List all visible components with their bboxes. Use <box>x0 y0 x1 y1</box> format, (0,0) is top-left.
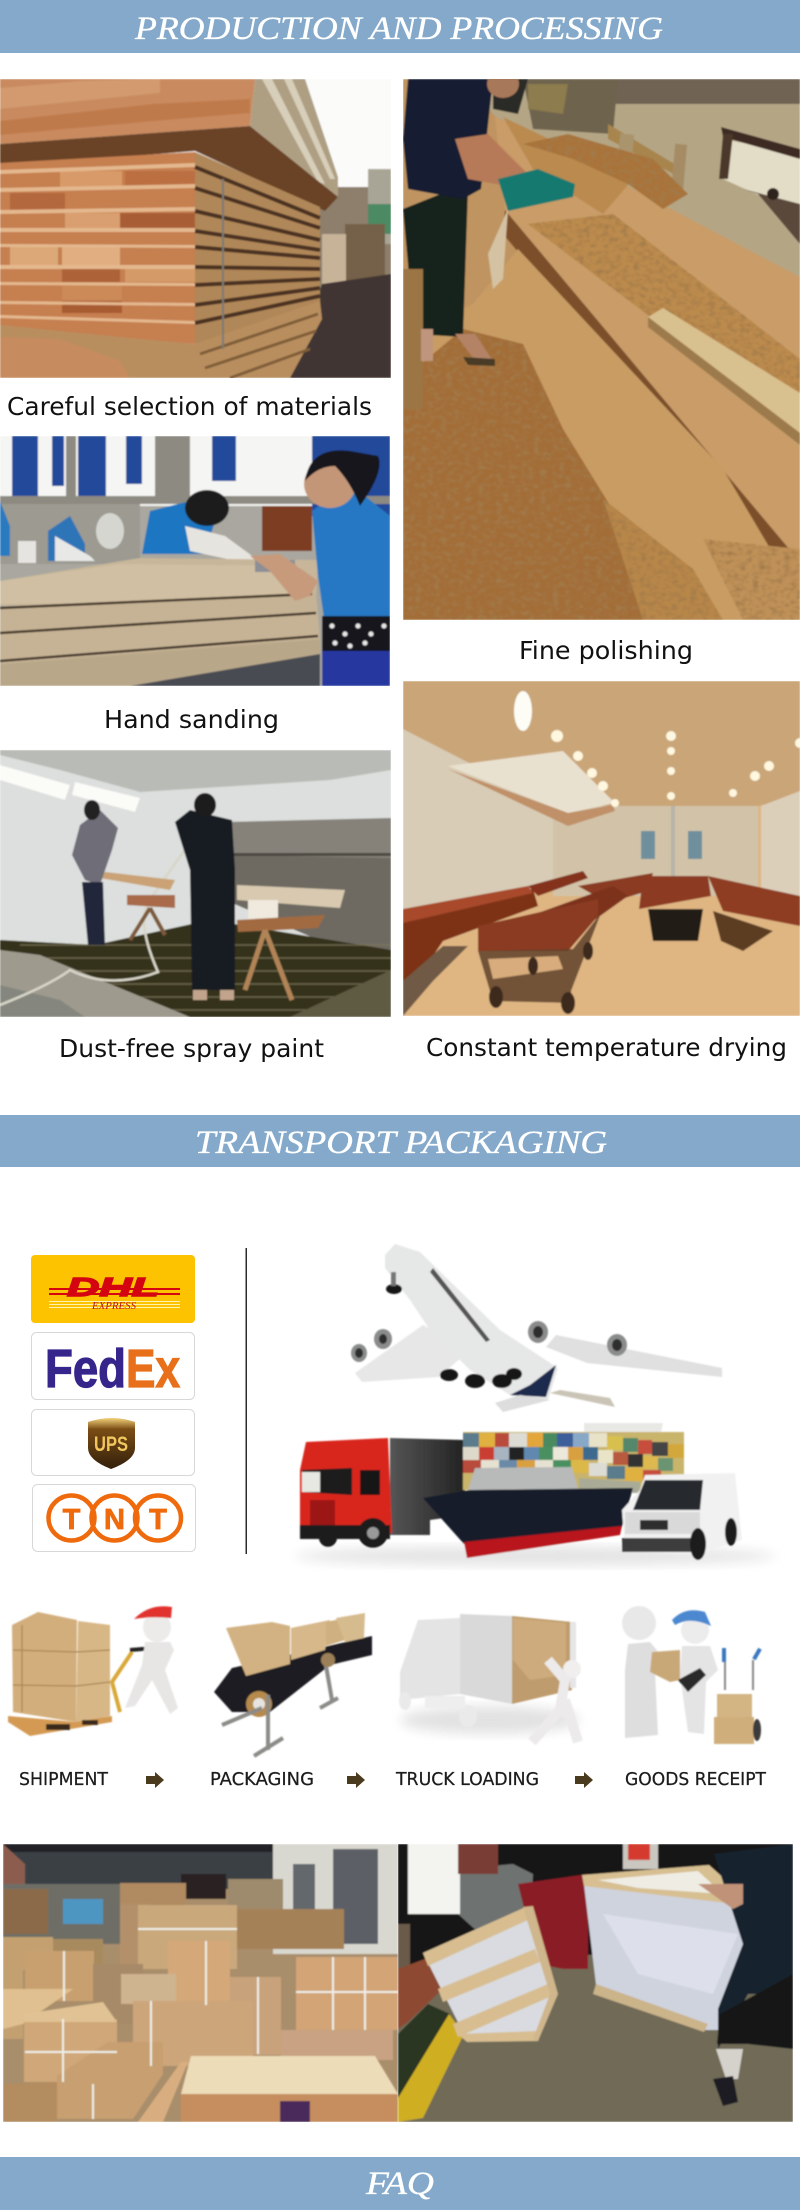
logo: UPS: UPS <box>94 1433 128 1456</box>
arrow: shipment to packaging <box>146 1772 164 1788</box>
caption: fine polishing: Fine polishing <box>519 636 693 665</box>
photo: stacked lumber <box>0 79 391 378</box>
illustration: airplane <box>351 1244 722 1412</box>
photo: wooden crates and wrapped goods <box>398 1844 793 2122</box>
logo: DHL Express <box>31 1255 195 1323</box>
photo: fine polishing workshop <box>403 79 800 620</box>
logo: TNT: N <box>104 1504 125 1536</box>
heading: production and processing <box>0 0 800 53</box>
photo: hand sanding <box>0 436 390 686</box>
heading: transport packaging: TRANSPORT PACKAGING <box>195 1125 607 1161</box>
heading: FAQ <box>0 2157 800 2210</box>
photo: constant temperature drying room <box>403 681 800 1016</box>
logo: TNT: T <box>63 1504 81 1536</box>
arrow: packaging to truck loading <box>347 1772 365 1788</box>
heading: FAQ: FAQ <box>365 2166 434 2202</box>
logo: FedEx: Fed <box>45 1339 126 1399</box>
step label: shipment: SHIPMENT <box>19 1769 109 1790</box>
step label: truck loading: TRUCK LOADING <box>395 1769 539 1790</box>
step illustration: packaging <box>214 1613 372 1756</box>
logo: DHL Express: EXPRESS <box>91 1301 136 1312</box>
logo: TNT <box>32 1484 196 1552</box>
heading: transport packaging <box>0 1115 800 1167</box>
logo: UPS <box>32 1410 194 1476</box>
step illustration: shipment <box>8 1606 178 1736</box>
caption: hand sanding: Hand sanding <box>104 705 279 734</box>
logo: DHL Express: DHL <box>67 1272 159 1302</box>
caption: constant temperature drying: Constant temperature drying <box>426 1033 787 1062</box>
photo: warehouse cartons <box>3 1844 398 2122</box>
logo: FedEx <box>32 1332 194 1400</box>
caption: careful selection of materials: Careful selection of materials <box>7 392 372 421</box>
logo: FedEx: Ex <box>126 1339 180 1399</box>
step illustration: truck loading <box>399 1614 581 1742</box>
illustration: truck, ship and van <box>295 1423 775 1566</box>
logo: TNT: T <box>149 1504 167 1536</box>
heading: production and processing: PRODUCTION AND PROCESSING <box>134 11 663 47</box>
step label: goods receipt: GOODS RECEIPT <box>625 1769 767 1790</box>
photo: dust-free spray booth <box>0 750 391 1017</box>
step illustration: goods receipt <box>622 1606 762 1744</box>
step label: packaging: PACKAGING <box>210 1769 314 1790</box>
divider line between logos and vehicles <box>246 1248 247 1554</box>
arrow: truck loading to goods receipt <box>575 1772 593 1788</box>
caption: dust-free spray paint: Dust-free spray paint <box>59 1034 324 1063</box>
